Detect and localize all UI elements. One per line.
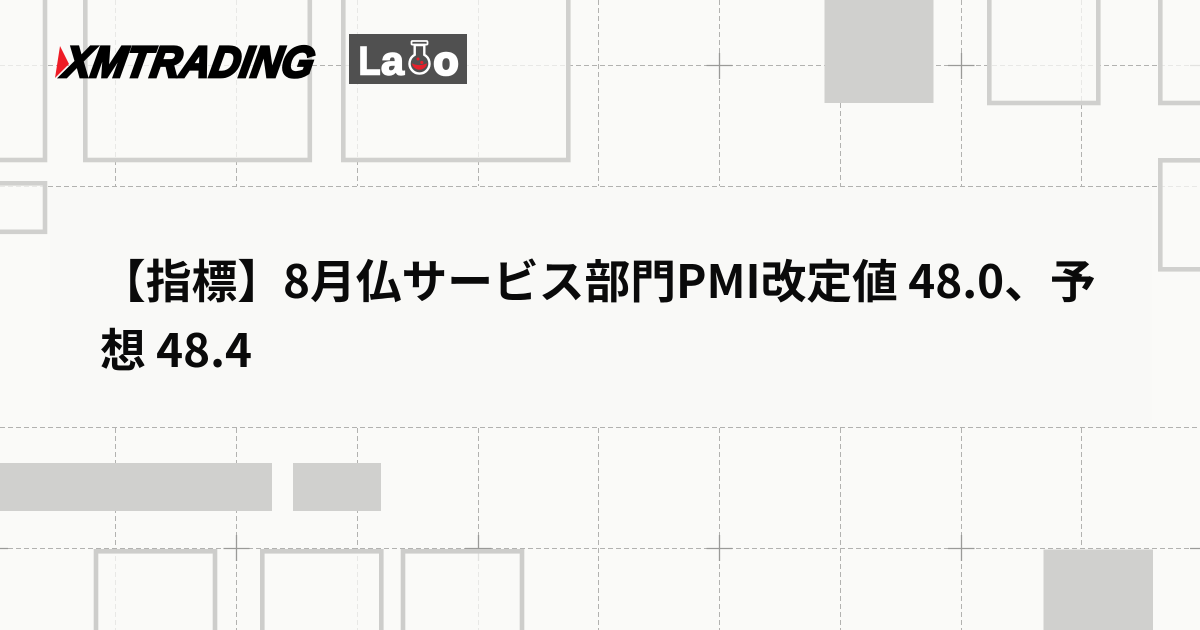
outlined box: top third: [343, 0, 568, 160]
title: 【指標】8月仏サービス部門PMI改定値 48.0、予: [100, 246, 1096, 312]
outlined box: top second: [85, 0, 310, 160]
outlined box: top left edge: [0, 0, 45, 160]
title: 想 48.4: [100, 315, 252, 381]
logo text o: o: [434, 40, 458, 84]
filled bar: bottom left wide: [0, 463, 272, 511]
outlined box: left small: [0, 183, 45, 232]
outlined box: bottom second: [262, 551, 381, 630]
logo background: [349, 34, 467, 84]
outlined box: bottom first: [96, 551, 215, 630]
outlined box: bottom third: [403, 551, 522, 630]
outlined box: right middle: [1160, 160, 1200, 269]
title panel: [50, 187, 1152, 427]
wordmark: XMTRADING: [57, 38, 318, 87]
filled bar: bottom left short: [293, 463, 381, 511]
outlined box: top far right: [1160, 0, 1200, 103]
filled box: top centre right: [824, 0, 934, 103]
title: [100, 246, 1096, 381]
icon: red arrow: [55, 46, 69, 78]
outlined box: top right: [989, 0, 1098, 103]
logo text L: L: [358, 40, 380, 84]
icon: flask: [410, 41, 430, 74]
filled box: bottom right: [1044, 550, 1153, 630]
logo text a: a: [381, 40, 405, 84]
